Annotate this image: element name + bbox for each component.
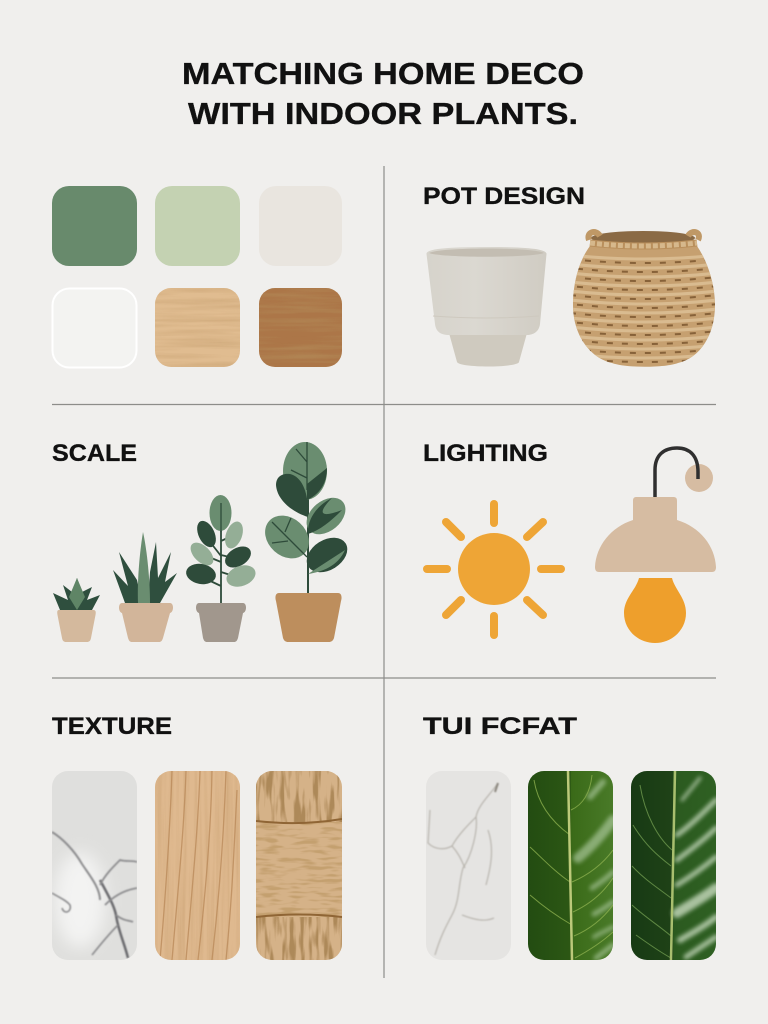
heading: tui fcfat: TUI FCFAT <box>423 713 577 740</box>
small succulent in pot <box>53 578 100 642</box>
icon: pendant lamp <box>595 448 716 643</box>
panel: scale <box>52 440 354 642</box>
title <box>182 56 584 131</box>
texture: grey marble <box>52 771 137 960</box>
swatch: light wood <box>155 288 240 367</box>
medium snake plant in pot <box>113 532 177 642</box>
texture: woven jute rope <box>256 771 342 960</box>
tall leafy plant in grey pot <box>184 495 259 642</box>
wicker basket <box>570 231 718 367</box>
title: WITH INDOOR PLANTS. <box>188 96 578 131</box>
grid dividers <box>52 166 716 978</box>
heading: pot design: POT DESIGN <box>423 183 585 210</box>
panel: pot design <box>423 183 718 367</box>
swatch: pale green <box>155 186 240 266</box>
texture: white marble <box>426 771 511 960</box>
panel: colour swatches <box>52 186 342 368</box>
ceramic pot <box>426 247 547 366</box>
swatch: warm cream <box>259 186 342 266</box>
panel: lighting <box>423 440 716 643</box>
large fiddle leaf plant in terracotta pot <box>256 442 354 642</box>
swatch: walnut wood <box>259 288 342 367</box>
swatch: sage green <box>52 186 137 266</box>
icon: sun <box>427 504 561 635</box>
heading: texture: TEXTURE <box>52 713 172 740</box>
texture: dark green leaf <box>631 771 716 960</box>
title: MATCHING HOME DECO <box>182 56 584 91</box>
heading: scale: SCALE <box>52 440 137 467</box>
texture: bright green leaf <box>528 771 613 960</box>
heading: lighting: LIGHTING <box>423 440 548 467</box>
texture: light wood <box>155 771 240 960</box>
swatch: white <box>52 288 136 368</box>
panel: tui fcfat <box>423 713 716 960</box>
panel: texture <box>52 713 342 960</box>
